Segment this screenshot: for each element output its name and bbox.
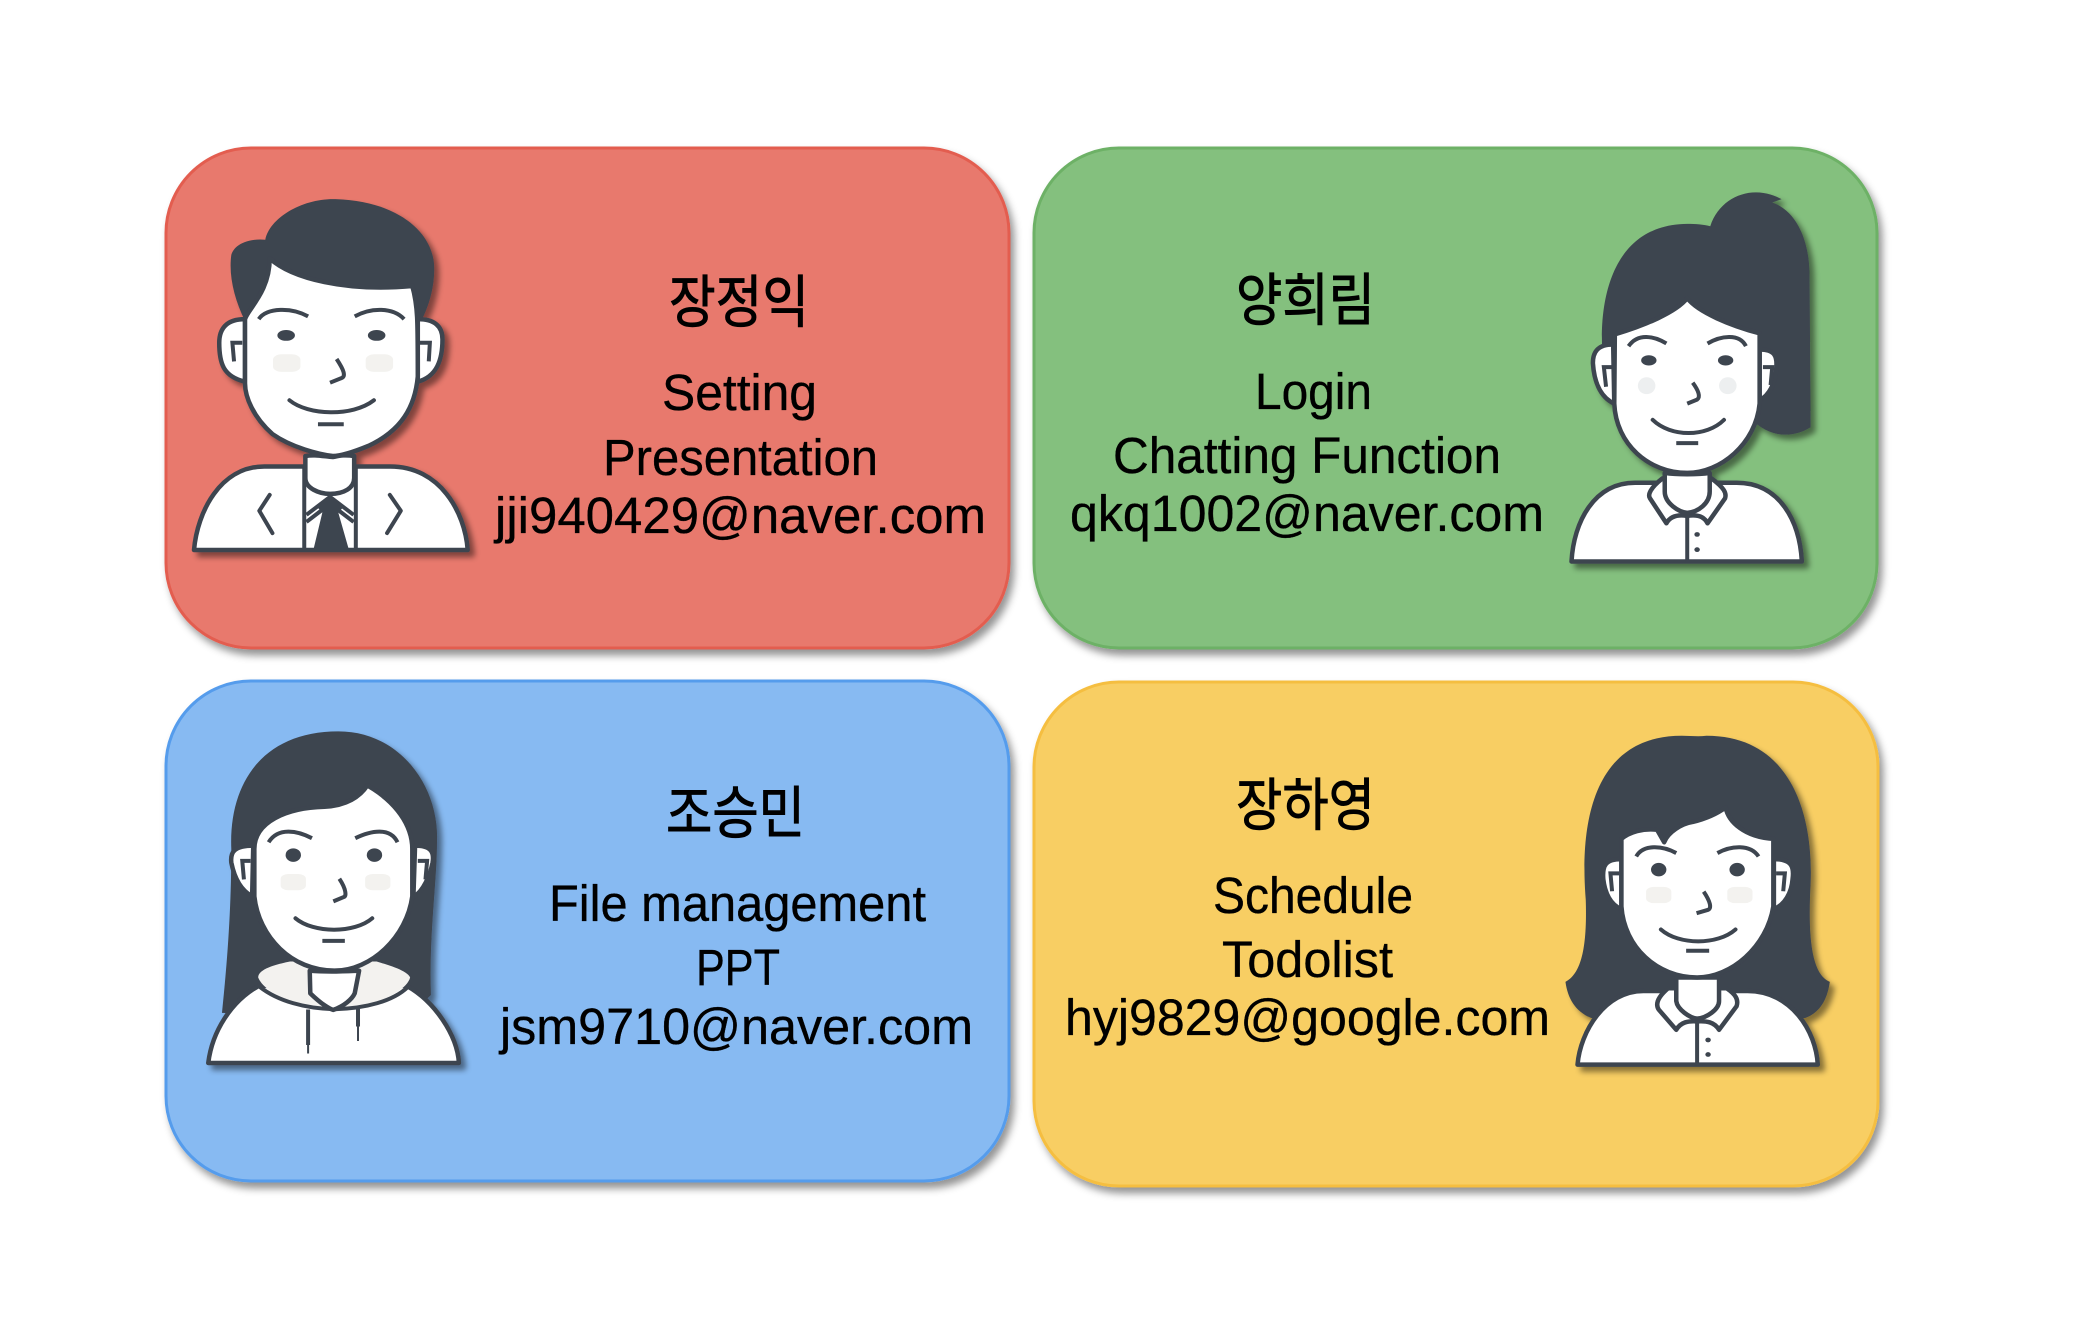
name: 양희림	[1236, 269, 1375, 333]
email: jji940429@naver.com	[493, 487, 986, 544]
icon: woman with ponytail	[1571, 192, 1811, 561]
role: Todolist: Todolist	[1222, 931, 1393, 988]
card background yellow	[1034, 682, 1878, 1186]
icon: woman with long hair and hoodie	[208, 731, 459, 1063]
role: File management: File management	[549, 875, 926, 932]
panel: 장하영 card	[1034, 682, 1878, 1186]
panel: 조승민 card	[166, 681, 1009, 1181]
name: 조승민	[666, 782, 805, 846]
icon: woman with wavy hair	[1565, 736, 1830, 1065]
card background green	[1034, 148, 1877, 648]
role: Chatting Function: Chatting Function	[1113, 427, 1501, 484]
panel: 장정익 card	[166, 148, 1009, 648]
email: qkq1002@naver.com	[1070, 485, 1544, 542]
role: Login: Login	[1255, 363, 1372, 420]
email: hyj9829@google.com	[1065, 989, 1550, 1046]
panel: 양희림 card	[1034, 148, 1877, 648]
role: Setting: Setting	[662, 364, 817, 421]
role: PPT: PPT	[696, 939, 780, 996]
icon: man with tie	[194, 199, 468, 550]
card background red	[166, 148, 1009, 648]
card background blue	[166, 681, 1009, 1181]
email: jsm9710@naver.com	[498, 998, 973, 1055]
name: 장정익	[669, 271, 809, 335]
name: 장하영	[1236, 774, 1375, 838]
role: Schedule: Schedule	[1213, 867, 1413, 924]
role: Presentation: Presentation	[603, 429, 878, 486]
